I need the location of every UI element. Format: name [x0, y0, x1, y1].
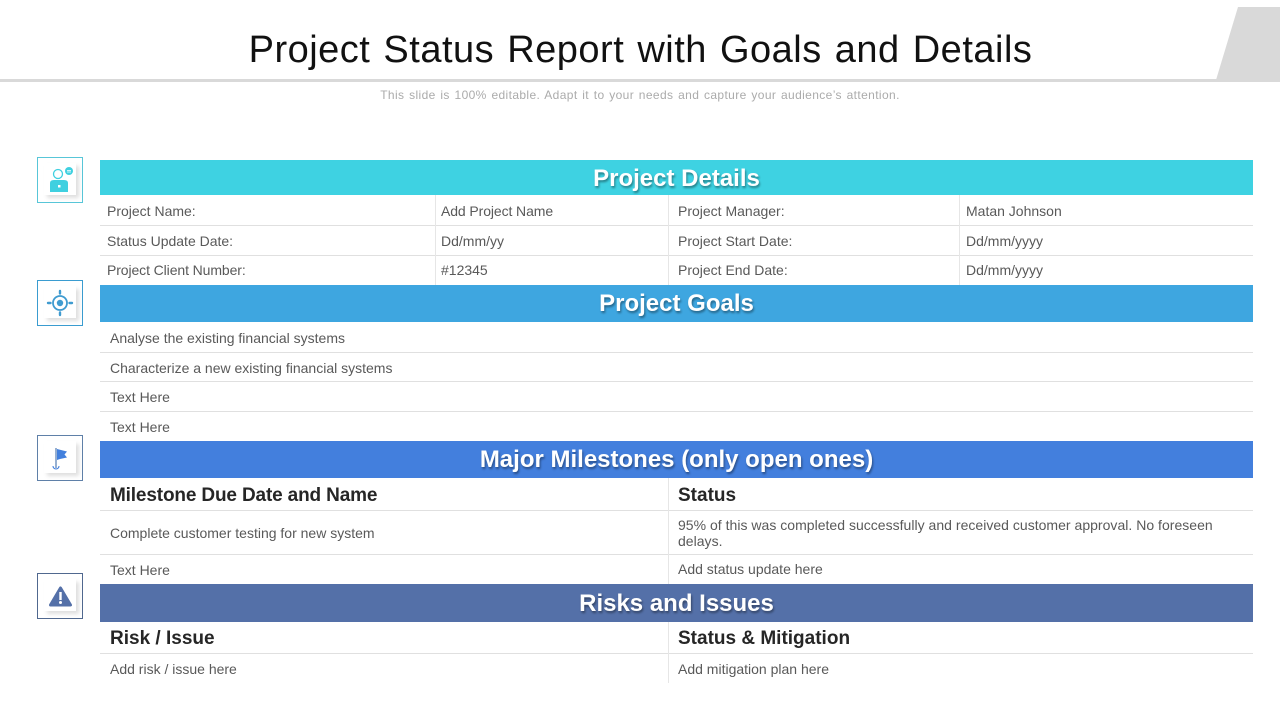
column header: risk: Risk / Issue	[110, 628, 215, 649]
column header: mitigation: Status & Mitigation	[678, 628, 850, 649]
goal 1: Analyse the existing financial systems	[110, 330, 345, 346]
mitigation entry: Add mitigation plan here	[678, 661, 829, 677]
subtitle: This slide is 100% editable. Adapt it to your needs and capture your audience’s attention.	[380, 88, 900, 102]
panel: risks and issues	[100, 584, 1253, 683]
details row 2: Dd/mm/yy	[441, 233, 504, 249]
icon: target	[37, 280, 83, 326]
milestone 2 status: Add status update here	[678, 561, 823, 577]
goal 3: Text Here	[110, 389, 170, 405]
heading: project goals: Project Goals	[599, 290, 754, 317]
heading: risks and issues: Risks and Issues	[579, 590, 774, 617]
details row 1: Add Project Name	[441, 203, 553, 219]
details row 1: Project Name:	[107, 203, 196, 219]
title: Project Status Report with Goals and Details	[249, 29, 1032, 71]
heading: major milestones: Major Milestones (only open ones)	[480, 446, 873, 473]
column header: milestone: Milestone Due Date and Name	[110, 485, 377, 506]
panel: project goals	[100, 285, 1253, 435]
heading: project details: Project Details	[593, 165, 760, 192]
icon: warning triangle	[37, 573, 83, 619]
milestone 1 status: 95% of this was completed successfully and received customer approval. No foreseen delays.	[678, 517, 1213, 549]
details row 1: Matan Johnson	[966, 203, 1062, 219]
details row 2: Dd/mm/yyyy	[966, 233, 1043, 249]
corner decoration	[1216, 7, 1280, 79]
heading: major milestones	[100, 441, 1253, 478]
icon: person with speech bubble	[37, 157, 83, 203]
panel: major milestones	[100, 441, 1253, 584]
details row 3: Project End Date:	[678, 262, 788, 278]
details row 1: Project Manager:	[678, 203, 785, 219]
title bar rule	[0, 79, 1280, 82]
panel: project details	[100, 160, 1253, 285]
heading: project goals	[100, 285, 1253, 322]
goal 2: Characterize a new existing financial systems	[110, 360, 392, 376]
column header: status: Status	[678, 485, 736, 506]
details row 2	[107, 233, 1043, 249]
risk entry: Add risk / issue here	[110, 661, 237, 677]
goal 4: Text Here	[110, 419, 170, 435]
heading: risks and issues	[100, 584, 1253, 622]
details row 3: #12345	[441, 262, 488, 278]
icon: flag	[37, 435, 83, 481]
details row 2: Project Start Date:	[678, 233, 792, 249]
milestone 2: Text Here	[110, 562, 170, 578]
milestone 1: Complete customer testing for new system	[110, 525, 375, 541]
details row 2: Status Update Date:	[107, 233, 233, 249]
details row 3: Project Client Number:	[107, 262, 246, 278]
details row 1	[107, 203, 1062, 219]
heading: project details	[100, 160, 1253, 195]
details row 3: Dd/mm/yyyy	[966, 262, 1043, 278]
details row 3	[107, 262, 1043, 278]
